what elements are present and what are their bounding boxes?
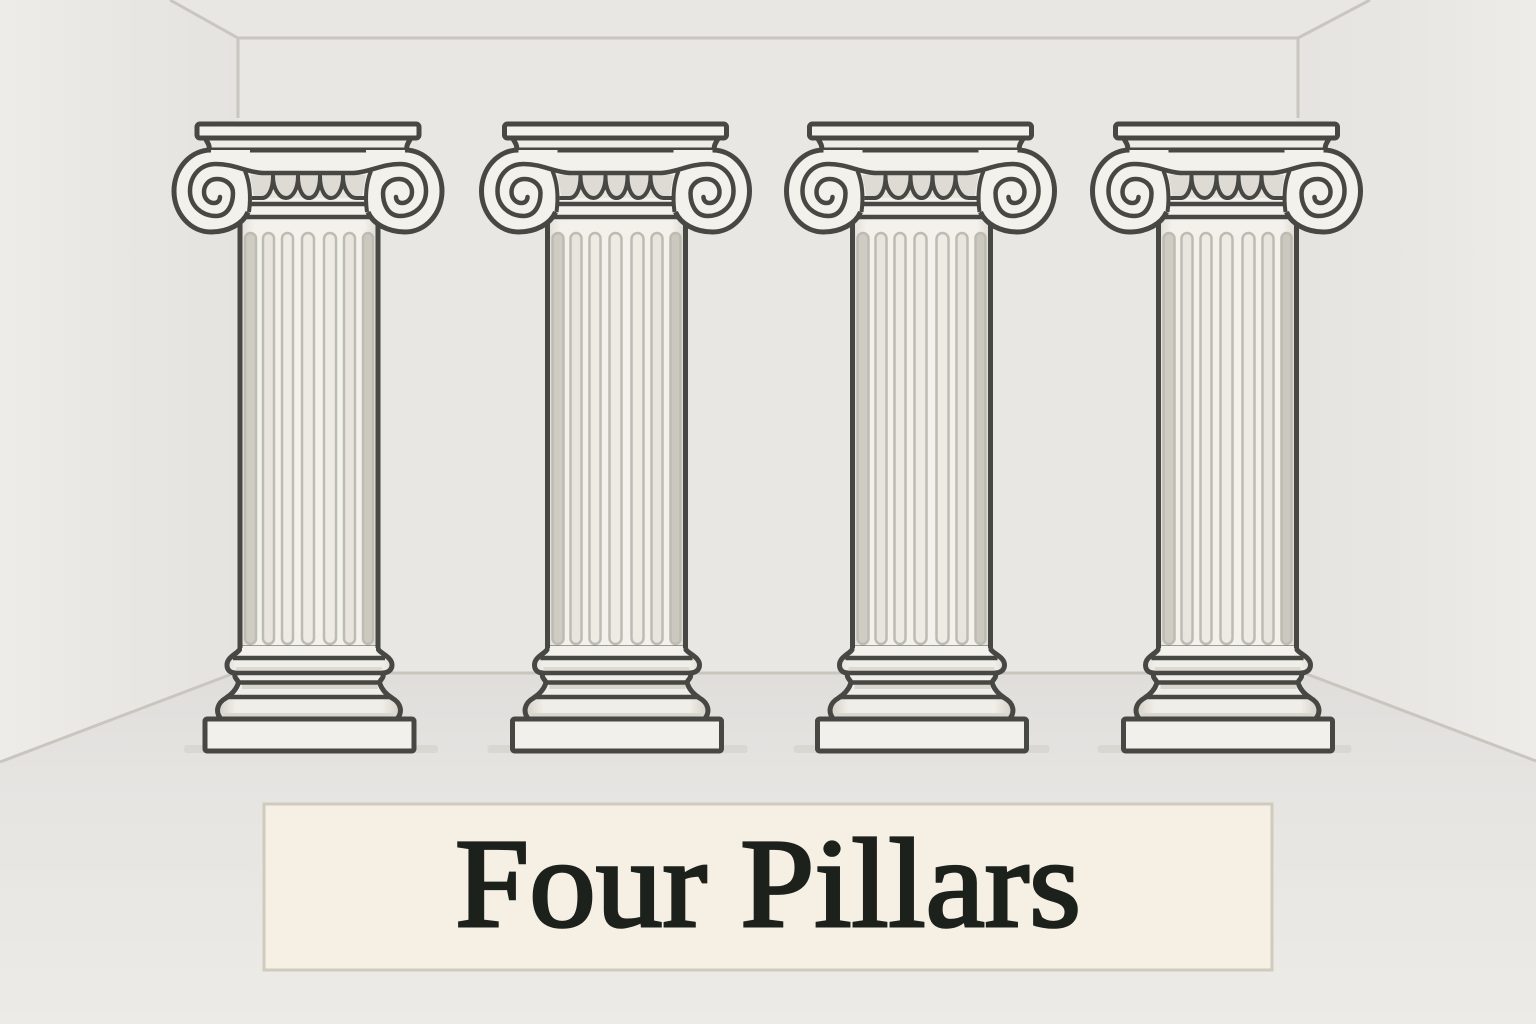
left wall: [0, 0, 238, 762]
base: [512, 640, 722, 751]
title plaque: [264, 804, 1272, 970]
base: [1124, 640, 1332, 751]
capital: [1092, 124, 1362, 232]
base: [205, 640, 414, 751]
floor: [0, 672, 1536, 1024]
base: [818, 640, 1026, 751]
floor shadow: [1098, 745, 1352, 753]
capital: [173, 124, 443, 232]
pillar 4: [1092, 124, 1362, 753]
shaft: [240, 216, 378, 661]
floor shadow: [184, 745, 438, 753]
title: Four Pillars: [455, 814, 1081, 954]
room edge lines: [0, 0, 1536, 762]
pillar 1: [173, 124, 443, 753]
floor shadow: [488, 745, 748, 753]
pillar 3: [786, 124, 1056, 753]
back wall: [238, 38, 1298, 672]
capital: [786, 124, 1056, 232]
shaft: [1158, 216, 1296, 661]
shaft: [548, 216, 686, 661]
pillar 2: [480, 124, 750, 753]
shaft: [852, 216, 990, 661]
floor shadow: [794, 745, 1050, 753]
plaque panel: [264, 804, 1272, 970]
capital: [480, 124, 750, 232]
right wall: [1298, 0, 1536, 762]
